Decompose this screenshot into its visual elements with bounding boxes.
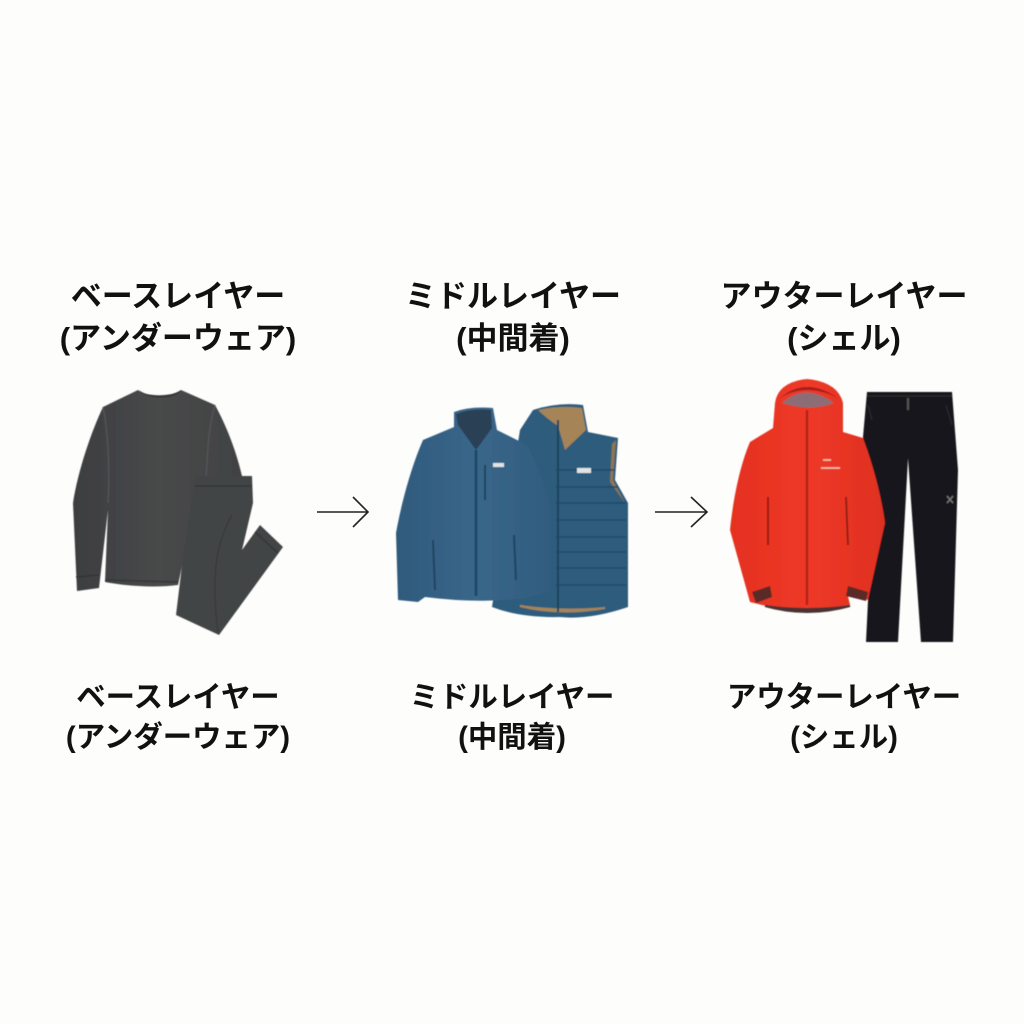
arrow 2 (655, 497, 707, 527)
heading: base layer top: (アンダーウェア) (60, 321, 296, 356)
icon: base layer shirt and leggings (73, 390, 283, 635)
heading: outer layer top: (シェル) (787, 321, 901, 356)
icon: mid layer fleece and vest (396, 404, 628, 618)
caption: outer layer bottom: (シェル) (790, 721, 898, 754)
pants (863, 392, 958, 642)
caption: outer layer bottom (727, 681, 961, 754)
caption: base layer bottom: ベースレイヤー (76, 681, 280, 714)
heading: base layer top (60, 279, 296, 356)
caption: mid layer bottom: ミドルレイヤー (410, 681, 614, 714)
caption: base layer bottom: (アンダーウェア) (66, 720, 290, 754)
icon: outer layer pants and jacket (730, 379, 958, 642)
vest (492, 404, 628, 618)
shirt (73, 390, 242, 591)
heading: base layer top: ベースレイヤー (71, 279, 285, 314)
heading: mid layer top: ミドルレイヤー (405, 279, 621, 314)
arrow 1 (317, 497, 368, 527)
heading: outer layer top: アウターレイヤー (720, 279, 968, 314)
fleece (396, 408, 555, 602)
heading: mid layer top: (中間着) (456, 321, 570, 356)
caption: base layer bottom (66, 681, 290, 754)
heading: mid layer top (405, 279, 621, 356)
caption: outer layer bottom: アウターレイヤー (727, 681, 961, 714)
caption: mid layer bottom: (中間着) (458, 721, 566, 754)
caption: mid layer bottom (410, 681, 614, 754)
leggings (176, 476, 283, 635)
jacket (730, 379, 885, 612)
heading: outer layer top (720, 279, 968, 356)
